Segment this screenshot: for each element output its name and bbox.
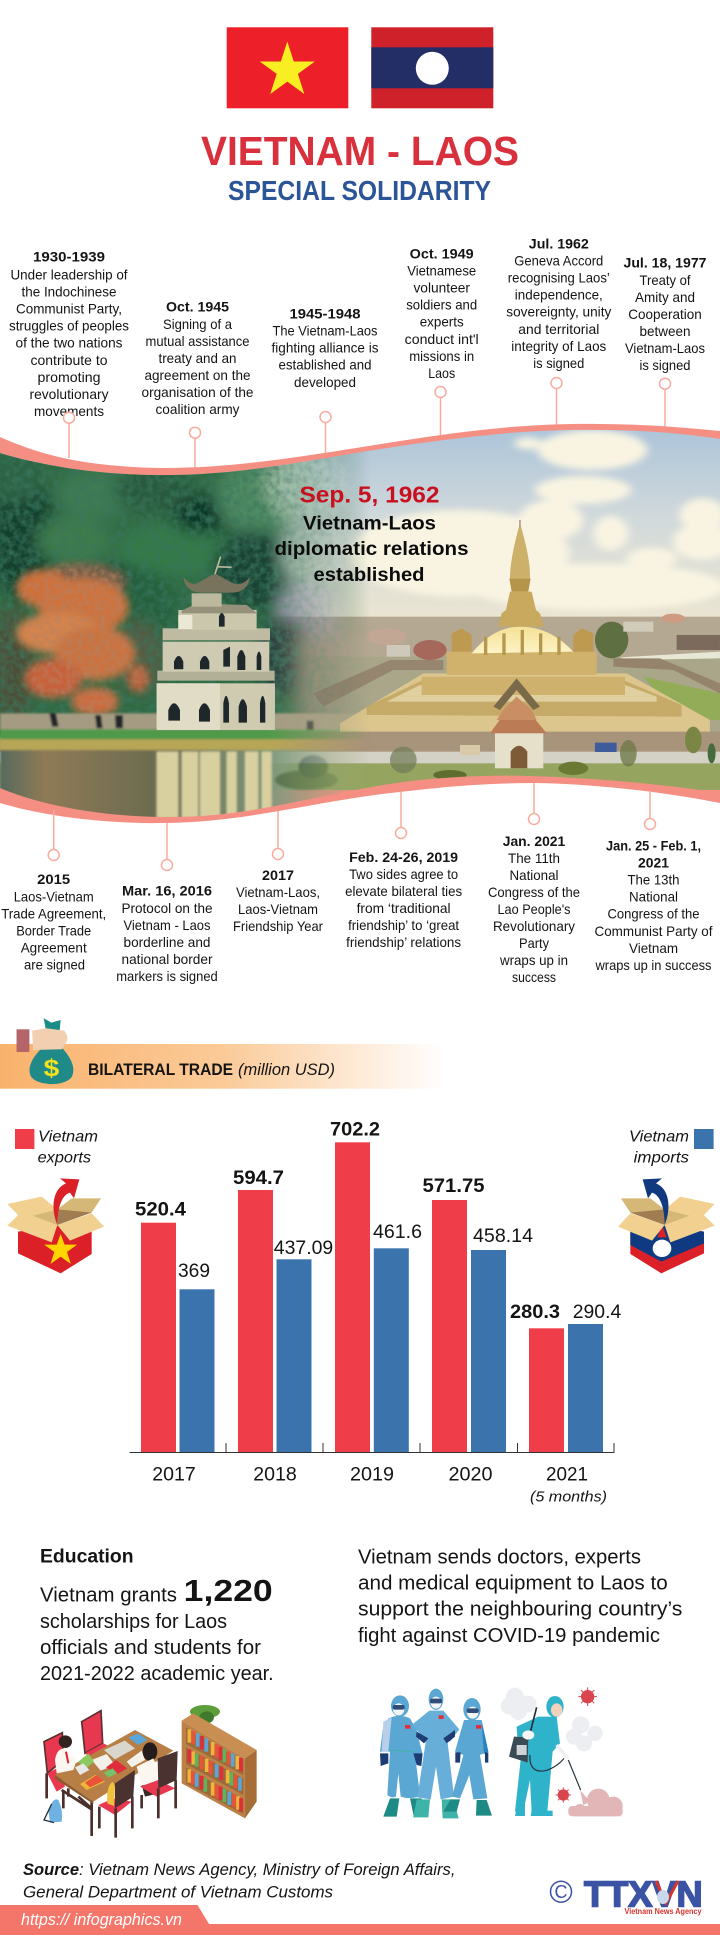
year labels: 2019 — [350, 1465, 394, 1486]
flag of Vietnam — [227, 27, 348, 108]
value labels: 458.14 — [473, 1226, 533, 1247]
milestone Feb. 24-26, 2019: Two sides agree to — [349, 866, 458, 882]
milestone 1930-1939: Under leadership of — [10, 266, 128, 282]
legend: Vietnam exports — [15, 1129, 98, 1167]
milestone 1945-1948: developed — [294, 374, 356, 390]
milestone 1930-1939 — [9, 249, 129, 419]
footer URL: https:// infographics.vn — [21, 1910, 182, 1929]
milestone 1945-1948 — [272, 305, 378, 390]
central headline: Sep. 5, 1962 — [300, 482, 440, 508]
milestone Jan. 25 - Feb. 1, 2021: Jan. 25 - Feb. 1, — [606, 837, 701, 853]
milestone Jul. 18, 1977: Jul. 18, 1977 — [624, 255, 707, 271]
education text block: 1,220 — [184, 1573, 273, 1608]
icon: plant — [190, 1705, 220, 1723]
milestone 1930-1939: promoting — [38, 369, 100, 385]
education text block: Education — [40, 1547, 134, 1568]
lower timeline text — [1, 833, 713, 985]
logo: TTXVN Vietnam News Agency: TTXVN — [584, 1874, 703, 1915]
milestone Jan. 2021: Congress of the — [488, 884, 580, 900]
milestone Jul. 1962 — [506, 235, 611, 371]
COVID-19 support text block: fight against COVID-19 pandemic — [358, 1625, 660, 1647]
milestone Jul. 1962: recognising Laos’ — [508, 270, 610, 286]
milestone Feb. 24-26, 2019: from ‘traditional — [357, 900, 451, 916]
milestone Mar. 16, 2016: Vietnam - Laos — [124, 917, 210, 933]
milestone Jul. 18, 1977: Cooperation — [628, 306, 702, 322]
legend: Vietnam exports: exports — [38, 1150, 91, 1167]
milestone 1945-1948: The Vietnam-Laos — [272, 322, 378, 338]
icon: medical worker left — [380, 1695, 423, 1817]
import bars — [180, 1248, 603, 1452]
COVID-19 support text block: support the neighbouring country’s — [358, 1599, 682, 1621]
milestone Mar. 16, 2016: borderline and — [124, 934, 210, 950]
milestone Jul. 1962: sovereignty, unity — [506, 304, 611, 320]
icon: bookcase — [182, 1713, 257, 1818]
source note — [23, 1861, 456, 1902]
milestone Oct. 1945: treaty and an — [158, 350, 236, 366]
photo: Hanoi turtle tower and That Luang stupa — [0, 420, 720, 827]
icon: pink spray cloud — [568, 1789, 623, 1816]
logo: TTXVN Vietnam News Agency: C — [554, 1882, 568, 1902]
milestone Feb. 24-26, 2019 — [345, 849, 462, 950]
COVID-19 support text block: Vietnam sends doctors, experts — [358, 1546, 641, 1568]
milestone Oct. 1945: Signing of a — [163, 316, 232, 332]
shoreline, lanterns and lake — [0, 712, 362, 817]
milestone Jan. 2021 — [488, 833, 580, 985]
axis — [130, 1443, 614, 1452]
year labels: (5 months) — [530, 1489, 607, 1506]
milestone Jul. 18, 1977 — [624, 255, 707, 373]
year labels — [152, 1465, 607, 1506]
legend: Vietnam imports: Vietnam — [629, 1129, 689, 1146]
milestone 2015: Laos-Vietnam — [14, 888, 94, 904]
value labels: 461.6 — [373, 1222, 422, 1243]
milestone Mar. 16, 2016: Mar. 16, 2016 — [122, 883, 212, 899]
milestone Feb. 24-26, 2019: friendship’ relations — [346, 934, 461, 950]
upper timeline text — [9, 235, 707, 419]
milestone Feb. 24-26, 2019: Feb. 24-26, 2019 — [349, 849, 458, 865]
value labels: 280.3 — [510, 1302, 560, 1323]
icon: viruses — [556, 1687, 597, 1803]
That Luang stupa grounds — [0, 520, 720, 790]
milestone 1930-1939: movements — [34, 403, 104, 419]
source note: : Vietnam News Agency, Ministry of Foreign Affairs, — [79, 1861, 456, 1879]
sky and clouds — [0, 420, 720, 625]
central headline: Vietnam-Laos — [303, 513, 436, 534]
milestone 1930-1939: revolutionary — [30, 386, 108, 402]
milestone Oct. 1949: missions in — [409, 348, 474, 364]
milestone Jan. 2021: Party — [519, 935, 549, 951]
source note: Source — [23, 1861, 79, 1879]
milestone 1930-1939: contribute to — [30, 352, 108, 368]
illustration: medical workers in protective suits — [380, 1687, 623, 1818]
icon: medical worker right — [443, 1698, 492, 1816]
bar chart: bilateral trade — [130, 1120, 622, 1506]
milestone Jul. 18, 1977: is signed — [640, 357, 690, 373]
education text block: officials and students for — [40, 1637, 261, 1659]
milestone Jan. 25 - Feb. 1, 2021: 2021 — [638, 854, 669, 870]
milestone Jul. 18, 1977: Amity and — [635, 289, 695, 305]
milestone Jan. 2021: Jan. 2021 — [503, 833, 565, 849]
milestone Jan. 2021: success — [512, 969, 556, 985]
milestone Oct. 1945 — [142, 299, 254, 417]
title: SPECIAL SOLIDARITY — [228, 175, 491, 206]
wave band — [0, 424, 720, 823]
milestone Jan. 2021: wraps up in — [499, 952, 568, 968]
upper timeline pins — [64, 378, 670, 470]
bilateral trade heading band — [0, 1044, 445, 1089]
education text block — [40, 1547, 274, 1685]
milestone Oct. 1945: agreement on the — [144, 367, 251, 383]
title — [201, 128, 519, 206]
milestone Mar. 16, 2016: Protocol on the — [122, 900, 213, 916]
value labels: 702.2 — [330, 1120, 380, 1141]
milestone 2015: are signed — [24, 957, 85, 973]
flag of Laos — [371, 27, 493, 108]
turtle tower — [157, 557, 275, 730]
milestone 2015: 2015 — [37, 871, 70, 887]
milestone Oct. 1949: Vietnamese — [407, 262, 476, 278]
icon: export box with Vietnam star — [7, 1178, 104, 1273]
milestone Jan. 25 - Feb. 1, 2021: Congress of the — [608, 906, 700, 922]
milestone Oct. 1949 — [405, 245, 479, 381]
milestone 1930-1939: struggles of peoples — [9, 318, 129, 334]
COVID-19 support text block — [358, 1546, 682, 1647]
milestone Oct. 1949: Oct. 1949 — [410, 245, 474, 261]
milestone Oct. 1949: volunteer — [413, 280, 470, 296]
milestone 1930-1939: of the two nations — [16, 335, 122, 351]
central headline — [274, 482, 468, 586]
milestone Jan. 2021: Lao People's — [498, 901, 570, 917]
year labels: 2017 — [152, 1465, 196, 1486]
value labels: 594.7 — [233, 1168, 284, 1189]
milestone Mar. 16, 2016: markers is signed — [116, 968, 218, 984]
milestone Oct. 1949: experts — [420, 314, 464, 330]
milestone Jan. 25 - Feb. 1, 2021 — [594, 837, 713, 973]
milestone Jan. 25 - Feb. 1, 2021: National — [629, 889, 678, 905]
milestone Feb. 24-26, 2019: elevate bilateral ties — [345, 883, 462, 899]
value labels: 290.4 — [573, 1302, 622, 1323]
milestone Mar. 16, 2016: national border — [122, 951, 213, 967]
foliage — [0, 452, 366, 737]
milestone 1945-1948: fighting alliance is — [272, 340, 378, 356]
milestone Jul. 1962: is signed — [533, 355, 584, 371]
orange tree — [17, 563, 148, 716]
year labels: 2020 — [448, 1465, 492, 1486]
milestone Jul. 18, 1977: between — [640, 323, 690, 339]
icon: import box with Laos flag — [618, 1178, 715, 1273]
icon: chairs and table — [44, 1711, 178, 1838]
milestone Jan. 25 - Feb. 1, 2021: The 13th — [628, 872, 680, 888]
milestone 2017: Vietnam-Laos, — [236, 884, 320, 900]
central headline: diplomatic relations — [274, 539, 468, 560]
milestone Jul. 18, 1977: Treaty of — [640, 272, 691, 288]
milestone 2015: Border Trade — [16, 922, 91, 938]
lower timeline pins — [48, 783, 655, 870]
milestone Jul. 1962: and territorial — [518, 321, 599, 337]
legend: Vietnam imports: imports — [634, 1150, 689, 1167]
milestone 1945-1948: 1945-1948 — [290, 305, 361, 321]
source note: General Department of Vietnam Customs — [23, 1884, 333, 1902]
milestone Oct. 1949: Laos — [428, 365, 455, 381]
milestone 2017: 2017 — [262, 867, 294, 883]
milestone Oct. 1945: Oct. 1945 — [166, 299, 229, 315]
icon: sprayer worker — [509, 1696, 581, 1816]
milestone 1945-1948: established and — [278, 357, 372, 373]
milestone Oct. 1949: soldiers and — [406, 297, 477, 313]
export bars — [141, 1142, 564, 1452]
year labels: 2018 — [253, 1465, 297, 1486]
milestone Mar. 16, 2016 — [116, 883, 218, 984]
value labels: 369 — [178, 1261, 210, 1282]
illustration: students studying and bookcase — [44, 1705, 257, 1838]
milestone Oct. 1949: conduct int'l — [405, 331, 479, 347]
milestone Oct. 1945: organisation of the — [142, 384, 254, 400]
milestone Jul. 1962: Jul. 1962 — [529, 235, 589, 251]
milestone 1930-1939: the Indochinese — [22, 283, 117, 299]
milestone 1930-1939: 1930-1939 — [33, 249, 105, 265]
legend: Vietnam imports — [629, 1129, 714, 1167]
milestone 2015: Trade Agreement, — [1, 905, 106, 921]
milestone Jul. 1962: integrity of Laos — [511, 338, 606, 354]
COVID-19 support text block: and medical equipment to Laos to — [358, 1572, 668, 1594]
education text block: scholarships for Laos — [40, 1611, 227, 1633]
year labels: 2021 — [546, 1465, 588, 1486]
milestone Jan. 2021: Revolutionary — [493, 918, 575, 934]
heading: bilateral trade: BILATERAL TRADE — [88, 1060, 233, 1079]
central headline: established — [314, 565, 424, 586]
milestone Jul. 18, 1977: Vietnam-Laos — [625, 340, 705, 356]
milestone Oct. 1945: mutual assistance — [146, 333, 250, 349]
milestone Jul. 1962: independence, — [515, 287, 603, 303]
value labels: 520.4 — [135, 1200, 186, 1221]
milestone 1930-1939: Communist Party, — [16, 300, 122, 316]
milestone Jan. 25 - Feb. 1, 2021: wraps up in success — [595, 957, 712, 973]
heading: bilateral trade: (million USD) — [238, 1060, 335, 1079]
Hanoi scene blended on left — [0, 452, 366, 817]
heading: bilateral trade — [88, 1060, 335, 1079]
milestone Feb. 24-26, 2019: friendship’ to ‘great — [348, 917, 459, 933]
education text block: 2021-2022 academic year. — [40, 1663, 274, 1685]
milestone Jul. 1962: Geneva Accord — [514, 252, 603, 268]
milestone Jan. 25 - Feb. 1, 2021: Vietnam — [629, 940, 678, 956]
education text block: Vietnam grants — [40, 1585, 177, 1607]
icon: medical worker middle — [412, 1689, 459, 1818]
value labels — [135, 1120, 622, 1323]
icon: money bag held in hand: $ — [44, 1055, 59, 1082]
milestone 2017 — [233, 867, 323, 934]
icon: money bag held in hand — [17, 1018, 73, 1084]
milestone Oct. 1945: coalition army — [156, 401, 240, 417]
milestone 2017: Friendship Year — [233, 918, 323, 934]
milestone Jan. 2021: National — [510, 867, 558, 883]
legend: Vietnam exports: Vietnam — [38, 1129, 98, 1146]
milestone Jan. 25 - Feb. 1, 2021: Communist Party of — [594, 923, 713, 939]
value labels: 437.09 — [274, 1238, 333, 1259]
milestone 2015 — [1, 871, 106, 973]
icon: disinfection clouds — [501, 1688, 603, 1751]
milestone 2015: Agreement — [21, 940, 87, 956]
milestone Jan. 2021: The 11th — [508, 850, 560, 866]
footer bar — [0, 1905, 720, 1935]
value labels: 571.75 — [422, 1176, 485, 1197]
title: VIETNAM - LAOS — [201, 128, 519, 174]
milestone 2017: Laos-Vietnam — [238, 901, 318, 917]
icon: backpack — [44, 1799, 62, 1823]
logo: TTXVN Vietnam News Agency: Vietnam News Agency — [624, 1907, 702, 1916]
